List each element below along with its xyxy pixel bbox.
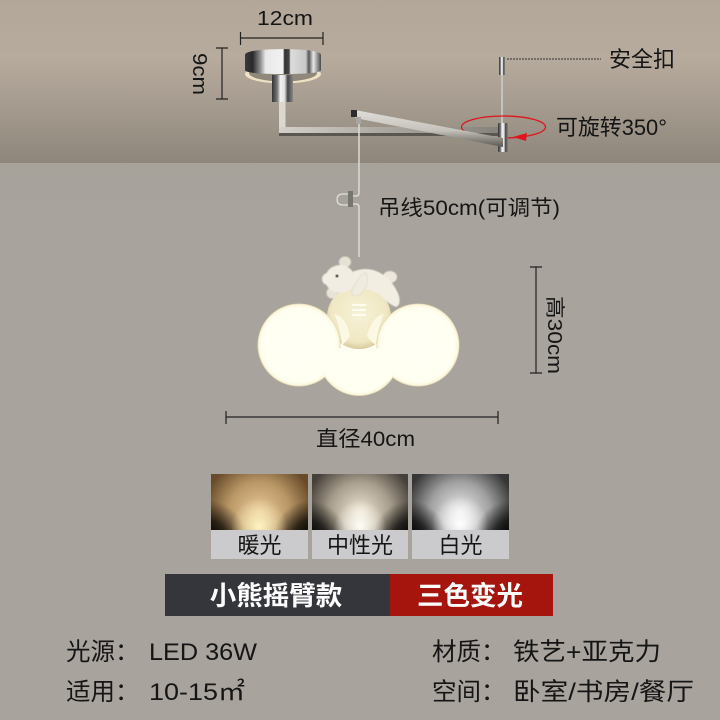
canopy and stem: [245, 49, 321, 102]
left globe: [258, 304, 340, 386]
banner: model name: 小熊摇臂款: [210, 581, 342, 611]
bottom globe: [318, 314, 400, 396]
dimension: 12cm: 12cm: [257, 8, 313, 30]
rotation ring: [462, 116, 546, 138]
banner: three colour light: 三色变光: [417, 581, 523, 611]
dimension: 12cm: [240, 8, 323, 45]
hanging wire with clip: [337, 124, 359, 257]
spec: material: 铁艺+亚克力: [513, 638, 661, 666]
spec: suitable area: 10-15㎡: [149, 678, 245, 706]
spec: material: 材质：: [432, 639, 506, 666]
swatch: white light: 白光: [438, 533, 483, 558]
swatch: neutral light: 中性光: [327, 533, 393, 558]
swatch: warm light: 暖光: [237, 533, 282, 558]
swing arm: [351, 110, 508, 152]
swatch: neutral light: [312, 474, 408, 559]
safety buckle and wire: [499, 57, 505, 125]
banner: model name: [165, 574, 390, 616]
right globe: [376, 304, 460, 386]
swatch: white light: [412, 474, 509, 559]
lamp: [258, 256, 460, 396]
ceiling: [0, 0, 720, 163]
dimension: diameter 40cm: [226, 411, 498, 451]
bear: [322, 256, 400, 307]
dimension: height 30cm: 高30cm: [543, 296, 566, 374]
dimension: 9cm: 9cm: [188, 53, 210, 95]
spec: suitable area: 适用：: [66, 679, 140, 706]
label: wire length: 吊线50cm(可调节): [378, 197, 560, 220]
fixed L-shaped arm: [279, 102, 500, 136]
globe overlap highlight: [325, 347, 393, 390]
label: safety buckle: 安全扣: [609, 47, 675, 72]
swatch: warm light: [211, 474, 308, 559]
label: rotation: 可旋转350°: [556, 115, 667, 140]
top globe: [327, 285, 391, 349]
spec: room: 卧室/书房/餐厅: [513, 678, 694, 706]
dimension: diameter 40cm: 直径40cm: [316, 428, 415, 451]
spec: room: 空间：: [432, 679, 506, 706]
dimension: 9cm: [188, 48, 228, 99]
rotation arrow: [513, 133, 527, 141]
dimension: height 30cm: [530, 267, 566, 374]
banner: three colour light: [390, 574, 553, 616]
spec: light source: 光源：: [66, 639, 140, 666]
spec: light source: LED 36W: [149, 639, 258, 666]
